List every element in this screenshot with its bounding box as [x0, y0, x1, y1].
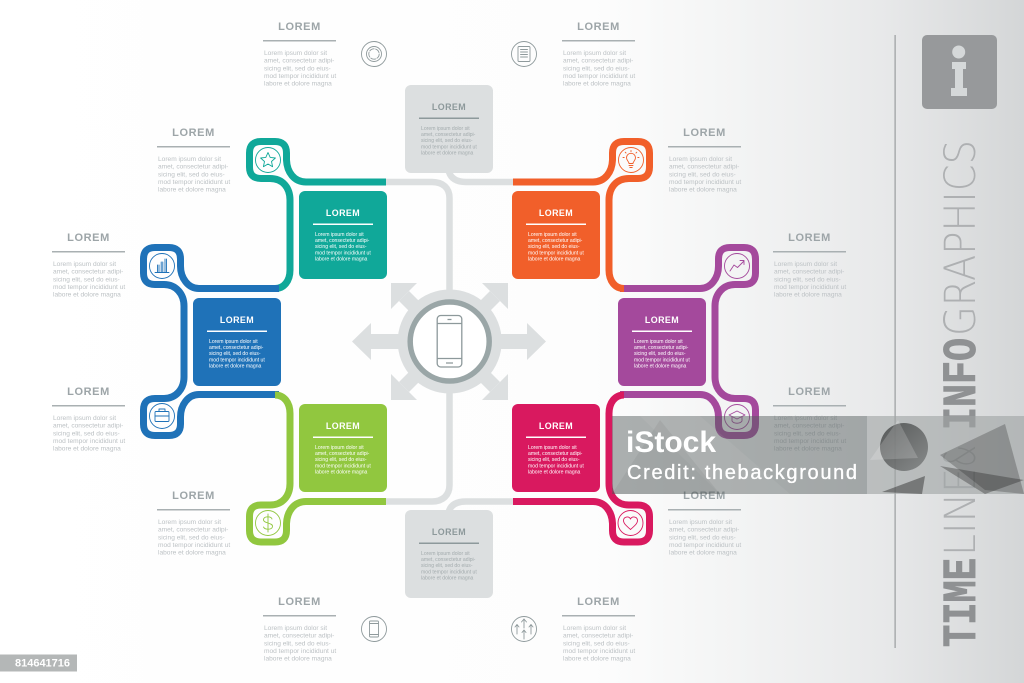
- card: gray top: LOREM: [432, 102, 466, 112]
- text block: top right: amet, consectetur adipi-: [563, 58, 633, 65]
- card: orange: Lorem ipsum dolor sit: [528, 232, 577, 238]
- text block: purple upper side: LOREM: [788, 232, 831, 244]
- text block: green side: LOREM: [172, 490, 215, 502]
- card: teal: [299, 191, 387, 279]
- card: orange: LOREM: [539, 208, 573, 218]
- icon: briefcase: [150, 404, 174, 428]
- text block: blue lower side: amet, consectetur adipi-: [53, 423, 123, 430]
- card: green: mod tempor incididunt ut: [315, 463, 371, 469]
- text block: crimson side: amet, consectetur adipi-: [669, 527, 739, 534]
- text block: top left: amet, consectetur adipi-: [264, 58, 334, 65]
- card: crimson: labore et dolore magna: [528, 469, 581, 475]
- card: purple: Lorem ipsum dolor sit: [634, 339, 683, 345]
- card: blue: sicing elit, sed do eius-: [209, 351, 261, 357]
- text block: bottom left: Lorem ipsum dolor sit: [264, 625, 327, 632]
- card: green: sicing elit, sed do eius-: [315, 457, 367, 463]
- icon: trend line: [724, 254, 750, 278]
- card: gray top: Lorem ipsum dolor sit: [421, 126, 470, 132]
- text block: crimson side: Lorem ipsum dolor sit: [669, 519, 732, 526]
- text block: blue lower side: labore et dolore magna: [53, 446, 121, 453]
- card: teal: sicing elit, sed do eius-: [315, 244, 367, 250]
- card: orange: mod tempor incididunt ut: [528, 250, 584, 256]
- text block: crimson side: sicing elit, sed do eius-: [669, 534, 736, 541]
- text block: green side: mod tempor incididunt ut: [158, 542, 230, 549]
- stock id label: [0, 654, 77, 672]
- text block: purple lower side: labore et dolore magna: [774, 446, 842, 453]
- text block: purple upper side: labore et dolore magna: [774, 292, 842, 299]
- gray connector lines: [386, 172, 513, 511]
- card: gray bottom: mod tempor incididunt ut: [421, 569, 477, 575]
- sidebar rule: [894, 35, 896, 648]
- text block: purple lower side: LOREM: [788, 386, 831, 398]
- text block: bottom right: Lorem ipsum dolor sit: [563, 625, 626, 632]
- connector: purple: [620, 248, 756, 436]
- text block: purple upper side: mod tempor incididunt ut: [774, 284, 846, 291]
- card: purple: LOREM: [645, 315, 679, 325]
- text block: bottom right: sicing elit, sed do eius-: [563, 640, 630, 647]
- card: teal: LOREM: [326, 208, 360, 218]
- text block: crimson side: labore et dolore magna: [669, 550, 737, 557]
- card: teal: Lorem ipsum dolor sit: [315, 232, 364, 238]
- text block: bottom right: [562, 596, 635, 663]
- card: green: [299, 404, 387, 492]
- text block: top right: sicing elit, sed do eius-: [563, 65, 630, 72]
- text block: top right: labore et dolore magna: [563, 81, 631, 88]
- text block: blue upper side: sicing elit, sed do eius-: [53, 276, 120, 283]
- card: purple: mod tempor incididunt ut: [634, 357, 690, 363]
- text block: orange side: labore et dolore magna: [669, 187, 737, 194]
- icon: light bulb: [618, 148, 644, 172]
- text block: purple lower side: [773, 386, 846, 453]
- text block: blue lower side: LOREM: [67, 386, 110, 398]
- card: teal: mod tempor incididunt ut: [315, 250, 371, 256]
- text block: teal side: Lorem ipsum dolor sit: [158, 156, 221, 163]
- text block: bottom right: labore et dolore magna: [563, 656, 631, 663]
- card: teal: amet, consectetur adipi-: [315, 238, 370, 244]
- text block: green side: amet, consectetur adipi-: [158, 527, 228, 534]
- text block: purple upper side: Lorem ipsum dolor sit: [774, 261, 837, 268]
- card: teal: labore et dolore magna: [315, 256, 368, 262]
- text block: blue upper side: mod tempor incididunt ut: [53, 284, 125, 291]
- card: orange: sicing elit, sed do eius-: [528, 244, 580, 250]
- card: blue: LOREM: [220, 315, 254, 325]
- icon: phone small: [362, 616, 386, 642]
- card: gray top: sicing elit, sed do eius-: [421, 138, 473, 144]
- card: crimson: Lorem ipsum dolor sit: [528, 445, 577, 451]
- arrows of the hub: [352, 283, 546, 400]
- text block: green side: Lorem ipsum dolor sit: [158, 519, 221, 526]
- connector: crimson: [513, 395, 650, 542]
- text block: bottom right: mod tempor incididunt ut: [563, 648, 635, 655]
- vertical title: GRAPHICS: [936, 140, 986, 336]
- icon: star: [256, 148, 280, 172]
- text block: teal side: amet, consectetur adipi-: [158, 164, 228, 171]
- watermark credit: Credit: thebackground: [627, 462, 857, 484]
- card: gray bottom: amet, consectetur adipi-: [421, 557, 476, 563]
- card: gray bottom: Lorem ipsum dolor sit: [421, 551, 470, 557]
- card: gray top: labore et dolore magna: [421, 150, 474, 156]
- text block: top left: [263, 21, 336, 88]
- text block: teal side: [157, 127, 230, 194]
- card: purple: labore et dolore magna: [634, 363, 687, 369]
- icon: graduation cap: [724, 404, 750, 430]
- text block: bottom left: mod tempor incididunt ut: [264, 648, 336, 655]
- text block: bottom left: labore et dolore magna: [264, 656, 332, 663]
- card: orange: [512, 191, 600, 279]
- card: gray top: [405, 85, 493, 173]
- text block: orange side: [668, 127, 741, 194]
- card: blue: Lorem ipsum dolor sit: [209, 339, 258, 345]
- text block: purple upper side: sicing elit, sed do eius-: [774, 276, 841, 283]
- card: crimson: mod tempor incididunt ut: [528, 463, 584, 469]
- text block: purple lower side: amet, consectetur adipi-: [774, 423, 844, 430]
- text block: blue lower side: sicing elit, sed do eius-: [53, 430, 120, 437]
- card: crimson: sicing elit, sed do eius-: [528, 457, 580, 463]
- text block: blue lower side: [52, 386, 125, 453]
- watermark band: [612, 416, 1024, 494]
- text block: blue upper side: Lorem ipsum dolor sit: [53, 261, 116, 268]
- text block: top left: Lorem ipsum dolor sit: [264, 50, 327, 57]
- text block: top left: labore et dolore magna: [264, 81, 332, 88]
- icon: bar chart: [150, 254, 174, 278]
- card: purple: [618, 298, 706, 386]
- text block: blue upper side: LOREM: [67, 232, 110, 244]
- card: gray top: mod tempor incididunt ut: [421, 144, 477, 150]
- text block: teal side: LOREM: [172, 127, 215, 139]
- icon: info badge: [922, 35, 997, 109]
- text block: orange side: amet, consectetur adipi-: [669, 164, 739, 171]
- text block: purple lower side: mod tempor incididunt ut: [774, 438, 846, 445]
- vertical title: [936, 140, 990, 647]
- text block: orange side: sicing elit, sed do eius-: [669, 171, 736, 178]
- connector: green: [250, 395, 386, 542]
- text block: top left: mod tempor incididunt ut: [264, 73, 336, 80]
- central hub: [352, 283, 546, 400]
- text block: blue upper side: amet, consectetur adipi-: [53, 269, 123, 276]
- text block: orange side: Lorem ipsum dolor sit: [669, 156, 732, 163]
- text block: bottom left: LOREM: [278, 596, 321, 608]
- card: purple: sicing elit, sed do eius-: [634, 351, 686, 357]
- text block: blue upper side: [52, 232, 125, 299]
- card: gray bottom: LOREM: [432, 527, 466, 537]
- card: crimson: amet, consectetur adipi-: [528, 451, 583, 457]
- card: blue: labore et dolore magna: [209, 363, 262, 369]
- card: purple: amet, consectetur adipi-: [634, 345, 689, 351]
- text block: orange side: mod tempor incididunt ut: [669, 179, 741, 186]
- text block: bottom left: amet, consectetur adipi-: [264, 633, 334, 640]
- card: green: amet, consectetur adipi-: [315, 451, 370, 457]
- card: gray top: amet, consectetur adipi-: [421, 132, 476, 138]
- text block: bottom left: sicing elit, sed do eius-: [264, 640, 331, 647]
- vertical title: TIME: [937, 558, 990, 647]
- card: green: Lorem ipsum dolor sit: [315, 445, 364, 451]
- icon: phone: [437, 316, 462, 367]
- card: green: LOREM: [326, 421, 360, 431]
- text block: top right: [562, 21, 635, 88]
- text block: bottom right: amet, consectetur adipi-: [563, 633, 633, 640]
- text block: crimson side: mod tempor incididunt ut: [669, 542, 741, 549]
- watermark brand: iStock: [626, 426, 716, 459]
- card: orange: amet, consectetur adipi-: [528, 238, 583, 244]
- vertical title: LINE: [936, 468, 986, 556]
- text block: top right: LOREM: [577, 21, 620, 33]
- text block: purple lower side: Lorem ipsum dolor sit: [774, 415, 837, 422]
- connector: blue: [144, 248, 279, 436]
- text block: green side: [157, 490, 230, 557]
- text block: teal side: sicing elit, sed do eius-: [158, 171, 225, 178]
- text block: blue upper side: labore et dolore magna: [53, 292, 121, 299]
- text block: purple upper side: amet, consectetur adipi-: [774, 269, 844, 276]
- icon: heart: [618, 510, 643, 536]
- card: gray bottom: sicing elit, sed do eius-: [421, 563, 473, 569]
- text block: teal side: labore et dolore magna: [158, 187, 226, 194]
- card: crimson: [512, 404, 600, 492]
- text block: green side: sicing elit, sed do eius-: [158, 534, 225, 541]
- text block: teal side: mod tempor incididunt ut: [158, 179, 230, 186]
- card: blue: [193, 298, 281, 386]
- text block: bottom right: LOREM: [577, 596, 620, 608]
- text block: orange side: LOREM: [683, 127, 726, 139]
- icon: dollar: [256, 510, 280, 536]
- card: crimson: LOREM: [539, 421, 573, 431]
- text block: top left: sicing elit, sed do eius-: [264, 65, 331, 72]
- text block: top right: Lorem ipsum dolor sit: [563, 50, 626, 57]
- text block: purple lower side: sicing elit, sed do eius-: [774, 430, 841, 437]
- card: blue: mod tempor incididunt ut: [209, 357, 265, 363]
- stock id label: 814641716: [15, 658, 70, 670]
- card: gray bottom: [405, 510, 493, 598]
- text block: blue lower side: mod tempor incididunt ut: [53, 438, 125, 445]
- vertical title: INFO: [937, 338, 990, 430]
- text block: bottom left: [263, 596, 336, 663]
- vertical title: &: [936, 445, 986, 467]
- text block: top left: LOREM: [278, 21, 321, 33]
- icon: document: [512, 42, 536, 66]
- connector: orange: [513, 142, 650, 288]
- text block: purple upper side: [773, 232, 846, 299]
- card: blue: amet, consectetur adipi-: [209, 345, 264, 351]
- connector: teal: [250, 142, 386, 288]
- text block: crimson side: LOREM: [683, 490, 726, 502]
- icon: ring: [362, 42, 386, 66]
- text block: top right: mod tempor incididunt ut: [563, 73, 635, 80]
- card: green: labore et dolore magna: [315, 469, 368, 475]
- text block: crimson side: [668, 490, 741, 557]
- card: orange: labore et dolore magna: [528, 256, 581, 262]
- card: gray bottom: labore et dolore magna: [421, 575, 474, 581]
- text block: green side: labore et dolore magna: [158, 550, 226, 557]
- icon: arrows up: [512, 616, 536, 642]
- text block: blue lower side: Lorem ipsum dolor sit: [53, 415, 116, 422]
